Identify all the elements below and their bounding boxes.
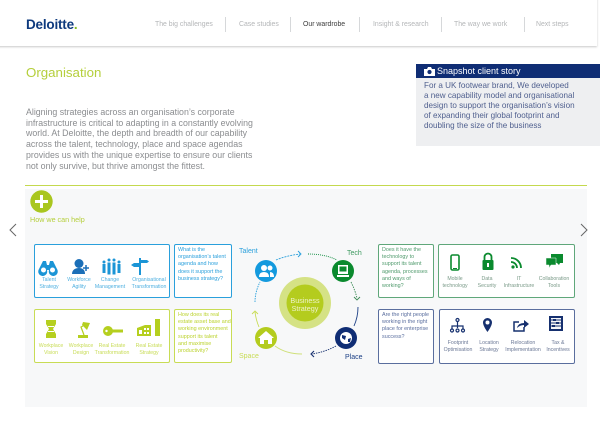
business strategy hub: Business	[290, 296, 320, 305]
panel: tech capabilities	[438, 244, 575, 298]
label: space: Space	[239, 353, 259, 360]
intro text	[26, 107, 253, 171]
icon: lamp	[78, 322, 90, 338]
icon: relocation	[513, 320, 529, 332]
label: Collaboration	[539, 276, 569, 282]
business strategy hub	[279, 277, 331, 329]
tech question: and ways of	[382, 276, 411, 282]
talent question	[174, 244, 232, 298]
navigation	[155, 17, 569, 32]
logo: Deloitte.	[26, 17, 77, 32]
arrow: tech segment	[308, 254, 337, 260]
label: Location	[479, 340, 499, 346]
snapshot text	[424, 81, 575, 130]
arrow: place segment	[354, 307, 358, 326]
talent question: agenda and how	[178, 261, 218, 267]
navigation: Next steps	[536, 21, 569, 28]
panel: how we can help	[25, 189, 587, 407]
label: Design	[73, 350, 89, 356]
label: Data	[482, 276, 492, 282]
label: Change	[101, 277, 119, 283]
label	[94, 343, 130, 356]
space question: How does its real	[178, 312, 219, 318]
tech question: technology to	[382, 254, 414, 260]
label: Relocation	[511, 340, 535, 346]
panel: space capabilities	[34, 309, 170, 363]
place question	[378, 309, 434, 364]
icon: padlock	[482, 252, 494, 270]
label	[504, 276, 534, 289]
arrow: tech to place	[351, 282, 360, 300]
label: place: Place	[345, 354, 363, 361]
talent question: business strategy?	[178, 276, 223, 282]
label	[444, 340, 472, 353]
subheading: How we can help	[30, 215, 85, 224]
icon: person plus	[72, 259, 89, 274]
label	[136, 343, 162, 356]
label: Talent	[42, 277, 56, 283]
arrow: space segment	[275, 346, 302, 354]
label: Workplace	[69, 343, 93, 349]
label: talent: Talent	[239, 248, 258, 255]
label: Workforce	[67, 277, 91, 283]
arrow: talent to tech	[276, 251, 301, 260]
label: Real Estate	[136, 343, 162, 349]
snapshot text: of expanding their global footprint and	[424, 111, 559, 120]
snapshot title: Snapshot client story	[437, 66, 521, 76]
label	[539, 276, 569, 289]
label: Agility	[72, 284, 86, 290]
label: Vision	[44, 350, 58, 356]
chart: business strategy cycle	[239, 248, 363, 361]
intro text: not only survive, but thrive amongst the fittest.	[26, 161, 205, 171]
label	[67, 277, 91, 290]
icon: space	[255, 327, 277, 349]
panel: snapshot client story	[416, 64, 600, 146]
talent question: does it support the	[178, 269, 222, 275]
label: Optimisation	[444, 347, 472, 353]
place question: working in the right	[382, 319, 427, 325]
label: Strategy	[139, 350, 159, 356]
icon: key	[103, 326, 123, 336]
panel: place capabilities	[439, 309, 575, 364]
icon: binoculars	[38, 261, 58, 276]
snapshot text: doubling the size of the business	[424, 121, 541, 130]
snapshot text: design to support the organisation’s vision	[424, 101, 575, 110]
navigation: The big challenges	[155, 21, 213, 28]
label	[38, 343, 63, 356]
navigation: Our wardrobe	[303, 21, 345, 28]
navigation: Insight & research	[373, 21, 429, 28]
icon: talent	[255, 260, 277, 282]
panel: talent capabilities	[34, 244, 170, 298]
arrow: left	[9, 224, 16, 236]
space question: working environment	[178, 326, 228, 332]
intro text: provides us with the unique expertise to ensure our clients	[26, 150, 252, 160]
arrow: right	[580, 224, 588, 236]
label: Strategy	[39, 284, 59, 290]
icon: plus	[30, 190, 53, 213]
tech question: agenda, processes	[382, 269, 428, 275]
intro text: across the talent, technology, place and space agendas	[26, 139, 242, 149]
label	[546, 340, 570, 355]
label: Incentives	[546, 347, 570, 353]
business strategy hub: Strategy	[292, 304, 319, 313]
space question: and maximise	[178, 341, 211, 347]
label	[132, 277, 166, 290]
talent question: What is the	[178, 247, 205, 253]
label: Organisational	[132, 277, 166, 283]
space question	[174, 309, 232, 363]
place question: Are the right people	[382, 312, 429, 318]
snapshot heading	[416, 64, 600, 78]
space question: productivity?	[178, 348, 208, 354]
label: Mobile	[447, 276, 463, 282]
icon: buildings	[137, 319, 160, 336]
icon: abacus	[549, 316, 563, 331]
divider rule	[25, 185, 587, 186]
icon: mobile	[450, 254, 460, 271]
space question: support its talent	[178, 334, 218, 340]
header bar	[0, 0, 597, 46]
tech question	[378, 244, 434, 298]
label: Strategy	[479, 347, 499, 353]
label	[95, 277, 126, 290]
arrow: talent segment	[255, 282, 260, 302]
label: Tools	[548, 283, 560, 289]
icon: place	[335, 327, 357, 349]
icon: rss	[511, 257, 522, 269]
label: Management	[95, 284, 125, 290]
label: Transformation	[132, 284, 166, 290]
icon: hourglass	[46, 320, 56, 338]
intro text: world. At Deloitte, the depth and breadth of our capability	[26, 128, 247, 138]
snapshot text: For a UK footwear brand, We developed	[424, 81, 569, 90]
navigation: Case studies	[239, 21, 279, 28]
label	[505, 340, 541, 353]
label: technology	[442, 283, 468, 289]
label	[479, 340, 499, 353]
label	[442, 276, 468, 289]
label: IT	[517, 276, 521, 282]
icon: group	[102, 258, 120, 274]
icon: signpost	[131, 258, 149, 275]
icon: camera	[424, 67, 435, 76]
label: Transformation	[95, 350, 129, 356]
intro text: infrastructure is critical to adapting in a constantly evolving	[26, 118, 253, 128]
label: Security	[478, 283, 496, 289]
label: tech: Tech	[347, 250, 362, 257]
talent question: organisation’s talent	[178, 254, 226, 260]
tech question: support its talent	[382, 261, 422, 267]
icon: tech	[332, 260, 354, 282]
place question: place for enterprise	[382, 326, 428, 332]
label: Tax &	[552, 340, 564, 346]
tech question: working?	[382, 283, 404, 289]
label: Real Estate	[99, 343, 125, 349]
arrow: place to space	[311, 346, 336, 357]
intro text: Aligning strategies across an organisation’s corporate	[26, 107, 235, 117]
label: Implementation	[505, 347, 541, 353]
icon: org tree	[450, 318, 466, 333]
icon: location pin	[483, 318, 492, 332]
arrow: space to talent	[252, 311, 259, 327]
label: Workplace	[39, 343, 63, 349]
place question: success?	[382, 334, 404, 340]
label: Footprint	[448, 340, 468, 346]
label	[478, 276, 496, 289]
label: Infrastructure	[504, 283, 534, 289]
navigation: The way we work	[454, 21, 507, 28]
label	[68, 343, 93, 356]
title: Organisation	[26, 65, 101, 80]
tech question: Does it have the	[382, 247, 421, 253]
snapshot text: a new capability model and organisational	[424, 91, 574, 100]
label	[39, 277, 59, 290]
icon: chat bubbles	[546, 254, 563, 268]
space question: estate asset base and	[178, 319, 231, 325]
